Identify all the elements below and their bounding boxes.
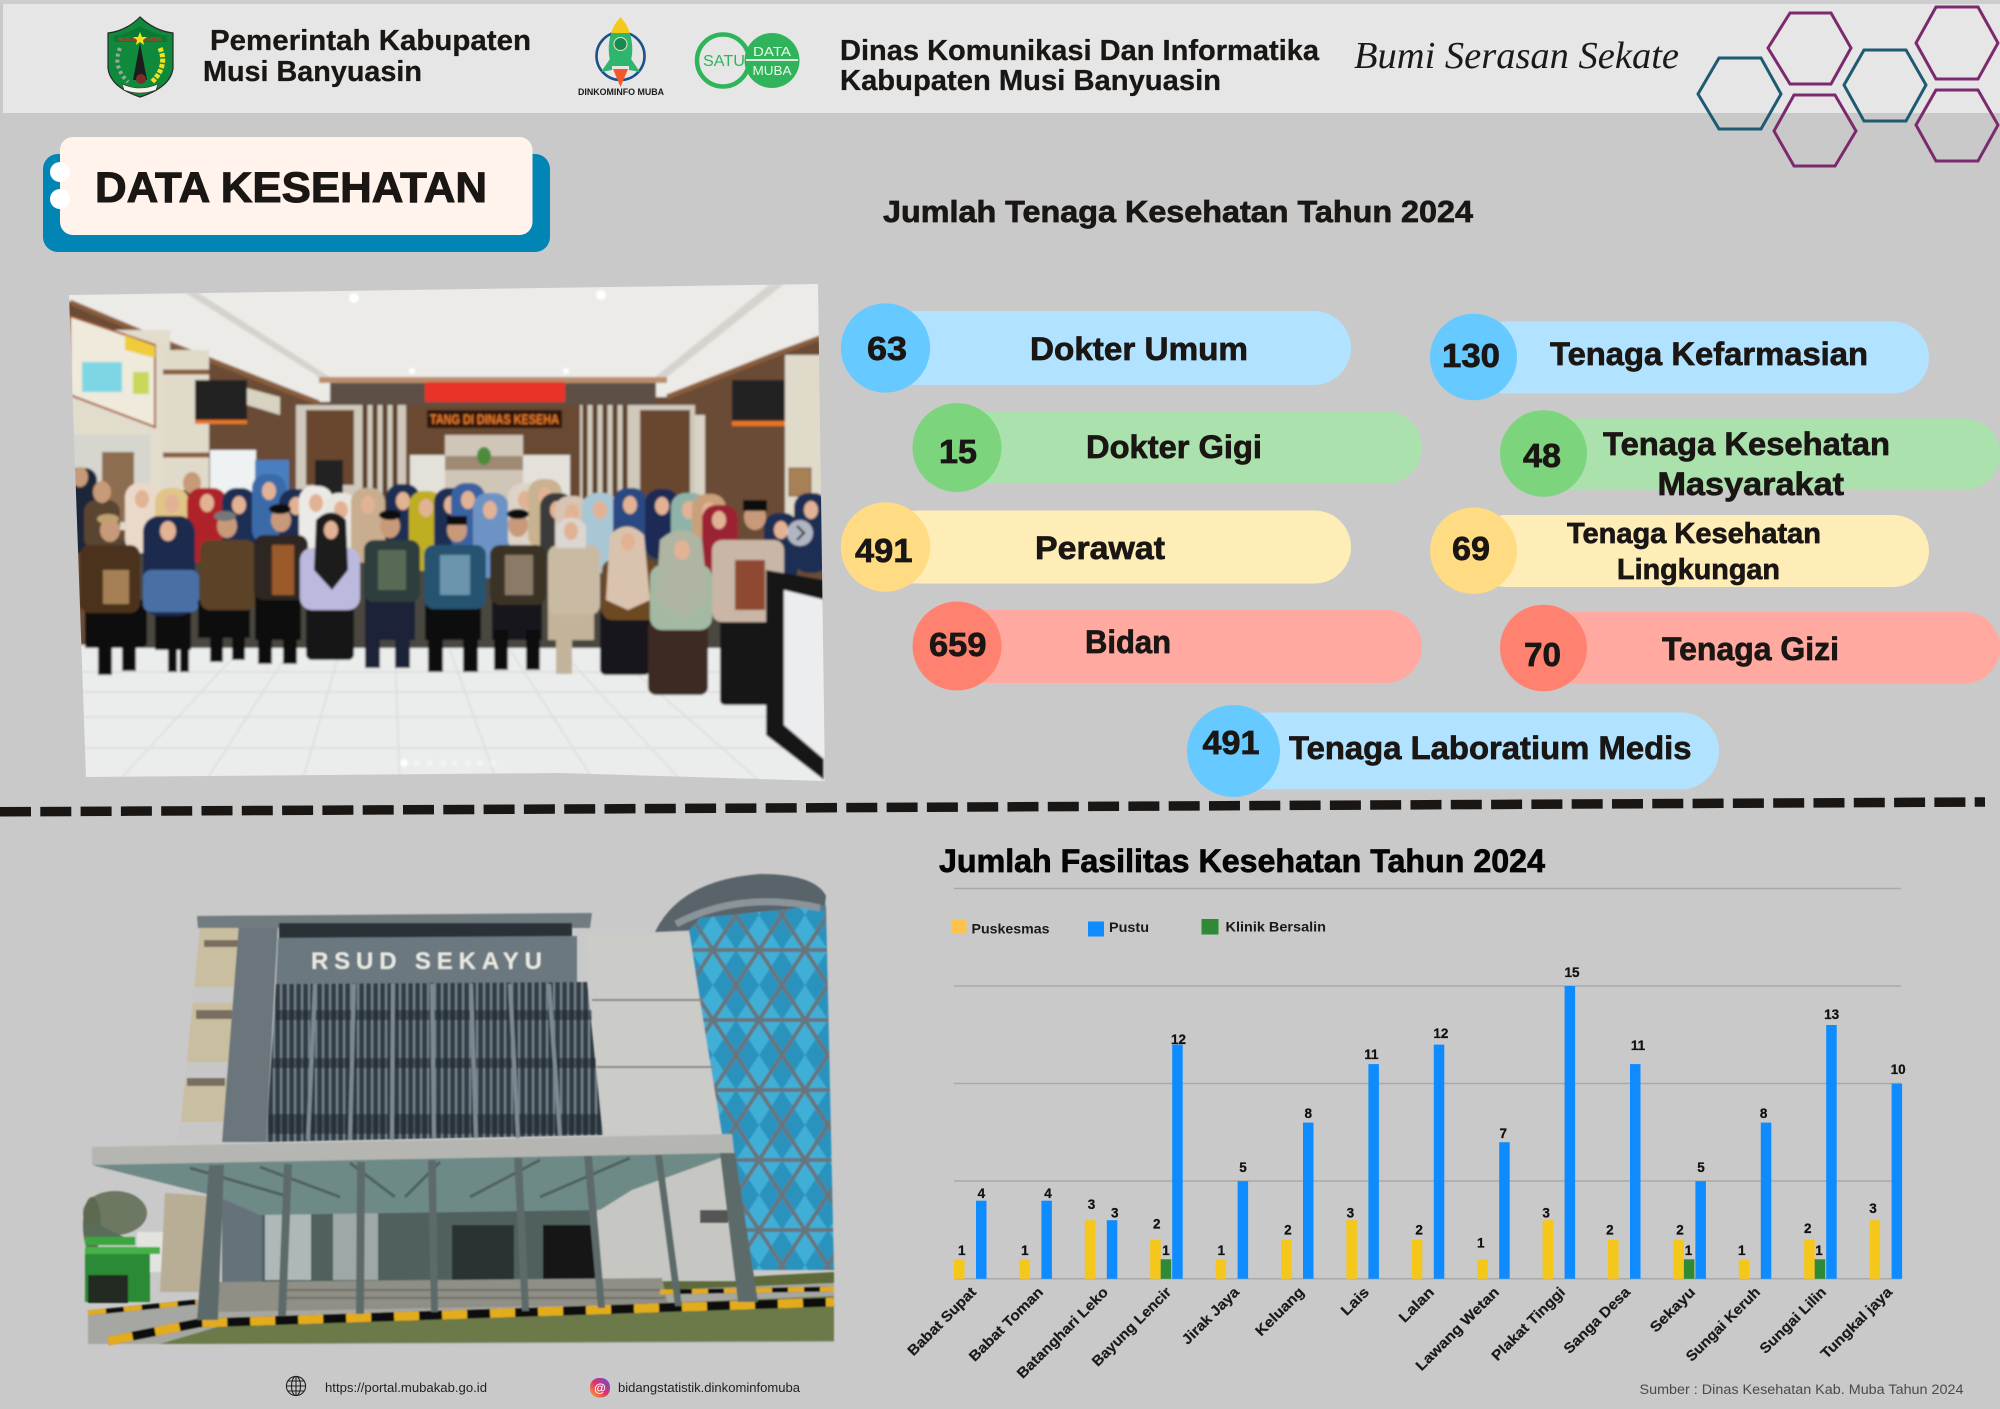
category labels: Sungai Keruh [1683,1285,1764,1365]
icon: Dinkominfo rocket logo: DINKOMINFO MUBA [578,87,664,98]
heading: Dinas Komunikasi dan Informatika: Dinas Komunikasi Dan Informatika [840,35,1320,67]
value labels: 2 [1606,1222,1614,1238]
footer: Instagram account [590,1378,801,1398]
lower storey [259,1190,597,1285]
footer: website link: https://portal.mubakab.go.id [325,1380,487,1395]
category labels [905,1284,1897,1382]
value labels: 1 [1021,1243,1029,1258]
carousel controls [787,520,813,546]
value labels: 12 [1171,1032,1186,1047]
right wall [695,405,825,525]
category labels: Sekayu [1647,1285,1699,1336]
floor [81,642,825,781]
stat pill: Tenaga Kesehatan Lingkungan 69: 69 [1452,530,1490,567]
value labels: 5 [1239,1160,1247,1175]
louvres [266,982,603,1142]
front row [80,500,784,705]
category labels: Tungkal jaya [1818,1284,1897,1362]
stat pill: Tenaga Kesehatan Lingkungan 69 [1430,507,1929,594]
stat pill: Tenaga Kefarmasian 130: Tenaga Kefarmasian [1550,336,1868,372]
category labels: Lalan [1396,1285,1438,1326]
stat pill: Tenaga Kesehatan Masyarakat 48: Tenaga Kesehatan [1603,426,1890,462]
stat pill: Tenaga Kefarmasian 130 [1430,314,1929,400]
heading: Pemerintah Kabupaten Musi Banyuasin: Musi Banyuasin [203,56,422,88]
category labels: Sanga Desa [1561,1284,1635,1357]
value labels: 3 [1869,1201,1877,1216]
stat pill: Perawat 491: Perawat [1035,530,1165,566]
canopy [92,1134,734,1165]
heading: Dinas Komunikasi dan Informatika [840,35,1320,97]
stat pill: Tenaga Kesehatan Masyarakat 48: 48 [1523,437,1561,474]
top cap [197,913,592,928]
stat pill: Tenaga Gizi 70: 70 [1524,636,1561,673]
foreground counter [766,570,824,780]
title tab: Data Kesehatan: DATA KESEHATAN [95,164,487,212]
ceiling [60,280,830,402]
category labels: Lawang Wetan [1413,1285,1503,1374]
value labels: 11 [1364,1047,1379,1062]
value labels: 1 [1738,1243,1746,1258]
stat pill: Tenaga Laboratium Medis 491 [1187,705,1719,797]
footer: Instagram account: bidangstatistik.dinkominfomuba [618,1380,801,1395]
back row [63,467,828,590]
stat pill: Bidan 659: 659 [929,626,986,663]
stat pill: Tenaga Laboratium Medis 491: 491 [1202,724,1260,761]
canopy pillars [197,1153,758,1320]
stat pill: Dokter Gigi 15: 15 [939,433,977,470]
value labels: 1 [1162,1243,1170,1258]
value labels: 8 [1305,1106,1313,1121]
icon: regency emblem [108,17,173,97]
steps [219,1278,668,1312]
source note: Sumber : Dinas Kesehatan Kab. Muba Tahun 2024 [1640,1382,1964,1397]
value labels: 1 [1477,1236,1485,1250]
curb [108,1302,834,1341]
icon: Satu Data Muba logo: DATA [753,44,791,59]
category labels: Batanghari Leko [1014,1284,1112,1382]
stat pill: Tenaga Kesehatan Lingkungan 69: Tenaga Kesehatan [1567,518,1821,550]
value labels [958,965,1906,1258]
photo: group of health staff: TANG DI DINAS KESEHA [430,411,559,427]
value labels: 2 [1804,1221,1812,1236]
heading: Pemerintah Kabupaten Musi Banyuasin [203,25,531,88]
header band [0,0,2000,113]
value labels: 13 [1824,1007,1840,1022]
bar chart: Jumlah Fasilitas Kesehatan [905,888,1906,1382]
category labels: Bayung Lencir [1089,1284,1175,1370]
category labels: Babat Toman [966,1285,1047,1365]
icon: regency emblem: MUSI BANYUASIN [118,37,162,43]
stat pill: Bidan 659 [912,602,1422,690]
value labels: 10 [1891,1062,1906,1077]
legend [951,919,1326,936]
icon: Instagram: @ [594,1381,606,1395]
stat pill: Dokter Gigi 15 [912,403,1422,492]
stat pill: Bidan 659: Bidan [1085,624,1171,660]
stat pill: Tenaga Laboratium Medis 491: Tenaga Laboratium Medis [1289,730,1692,766]
icon: globe [286,1376,306,1396]
slogan: Bumi Serasan Sekate: Bumi Serasan Sekate [1354,35,1679,77]
bars: Pustu [976,986,1902,1279]
value labels: 11 [1631,1038,1646,1053]
value labels: 2 [1415,1222,1423,1238]
icon: Dinkominfo rocket logo [578,17,664,98]
value labels: 1 [1218,1243,1226,1258]
icon: Satu Data Muba logo: MUBA [752,63,792,78]
value labels: 4 [978,1186,986,1201]
stat pill: Dokter Umum 63: Dokter Umum [1030,331,1248,367]
value labels: 4 [1044,1186,1052,1201]
trees and small green building [83,1191,167,1303]
icon: Satu Data Muba logo: SATU [703,53,745,70]
chairs shadow [85,540,765,648]
value labels: 8 [1760,1106,1768,1121]
value labels: 7 [1500,1126,1507,1141]
glass tower [689,905,834,1270]
LED sign [427,410,562,428]
value labels: 2 [1153,1216,1161,1232]
stat pill: Tenaga Kesehatan Lingkungan 69: Lingkungan [1617,554,1780,586]
value labels: 1 [958,1243,966,1258]
legend: Pustu [1109,919,1149,935]
tower roof [655,874,826,932]
stat pill: Tenaga Kefarmasian 130: 130 [1442,337,1500,374]
category labels: Jirak Jaya [1179,1284,1244,1348]
left wall [60,330,170,530]
category labels: Plakat Tinggi [1489,1285,1569,1364]
photo: RSUD Sekayu building: RSUD SEKAYU [311,948,542,975]
value labels: 1 [1815,1243,1823,1258]
canopy underside [92,1153,734,1215]
value labels: 3 [1347,1206,1355,1220]
value labels: 3 [1542,1206,1550,1220]
footer: website link [286,1376,487,1396]
bars: Puskesmas [954,1220,1880,1279]
stat pill: Perawat 491: 491 [855,532,912,569]
heading: Pemerintah Kabupaten Musi Banyuasin: Pemerintah Kabupaten [210,25,531,57]
heading: Jumlah Fasilitas Kesehatan Tahun 2024: Jumlah Fasilitas Kesehatan Tahun 2024 [939,843,1545,879]
value labels: 12 [1433,1026,1448,1041]
icon: Satu Data Muba logo [697,33,800,88]
stat pill: Tenaga Kesehatan Masyarakat 48: Masyarakat [1658,466,1844,502]
category labels: Keluang [1253,1285,1308,1340]
value labels: 3 [1088,1197,1096,1212]
heading: Jumlah Tenaga Kesehatan Tahun 2024: Jumlah Tenaga Kesehatan Tahun 2024 [883,194,1474,229]
legend: Puskesmas [972,920,1050,936]
photo: RSUD Sekayu building [83,874,834,1344]
value labels: 5 [1697,1160,1705,1175]
back wall stripes [294,403,408,497]
value labels: 3 [1111,1206,1119,1220]
title tab: Data Kesehatan [43,137,550,252]
value labels: 1 [1685,1243,1693,1258]
icon: Instagram [590,1378,610,1398]
stat pill: Tenaga Gizi 70 [1500,605,2000,691]
value labels: 15 [1564,965,1580,980]
photo: group of health staff [60,280,830,790]
decorative hexagons [1698,7,1998,166]
heading: Dinas Komunikasi dan Informatika: Kabupaten Musi Banyuasin [840,65,1221,97]
sign panel [276,936,577,984]
legend: Klinik Bersalin [1226,919,1326,935]
ground and grass [88,1280,834,1344]
stat pill: Tenaga Kesehatan Masyarakat 48 [1500,410,2000,502]
stat pill: Dokter Umum 63: 63 [867,330,907,367]
category labels: Lais [1338,1285,1373,1319]
grey column [222,923,278,1142]
stat pill: Tenaga Gizi 70: Tenaga Gizi [1662,631,1839,667]
white block [585,934,722,1135]
stat pill: Dokter Umum 63 [841,303,1351,393]
value labels: 2 [1284,1222,1292,1238]
stat pill: Dokter Gigi 15: Dokter Gigi [1086,429,1262,465]
stat pill: Perawat 491 [841,502,1351,592]
bars: Klinik Bersalin [1161,1259,1825,1279]
red LED strip [425,382,565,402]
value labels: 2 [1676,1222,1684,1238]
category labels: Sungai Lilin [1757,1285,1830,1357]
cream perforated strip [179,927,240,1142]
category labels: Babat Supat [905,1284,980,1359]
